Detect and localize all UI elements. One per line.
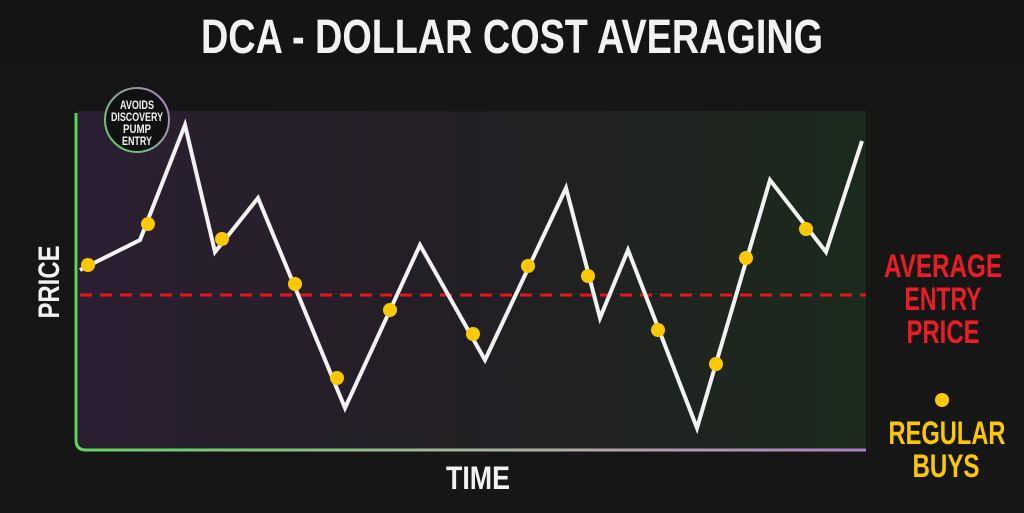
buy dots bbox=[81, 217, 813, 385]
badge: avoids discovery pump entry bbox=[105, 88, 169, 152]
legend: regular buys: BUYS bbox=[912, 448, 980, 484]
axes bbox=[76, 113, 866, 450]
legend: regular buys bbox=[888, 393, 1006, 484]
y axis label: PRICE bbox=[33, 246, 66, 318]
badge: avoids discovery pump entry: PUMP bbox=[123, 122, 151, 136]
badge: avoids discovery pump entry: DISCOVERY bbox=[111, 110, 163, 124]
legend: average entry price: PRICE bbox=[906, 314, 980, 350]
legend: average entry price: ENTRY bbox=[904, 281, 982, 317]
legend: average entry price bbox=[884, 248, 1002, 350]
title: DCA - DOLLAR COST AVERAGING bbox=[201, 11, 823, 64]
badge: avoids discovery pump entry: AVOIDS bbox=[120, 98, 154, 112]
chart panel bbox=[76, 111, 866, 450]
average entry line bbox=[80, 294, 866, 296]
price line bbox=[80, 125, 862, 428]
x axis label: TIME bbox=[446, 460, 510, 496]
badge: avoids discovery pump entry: ENTRY bbox=[122, 134, 152, 148]
